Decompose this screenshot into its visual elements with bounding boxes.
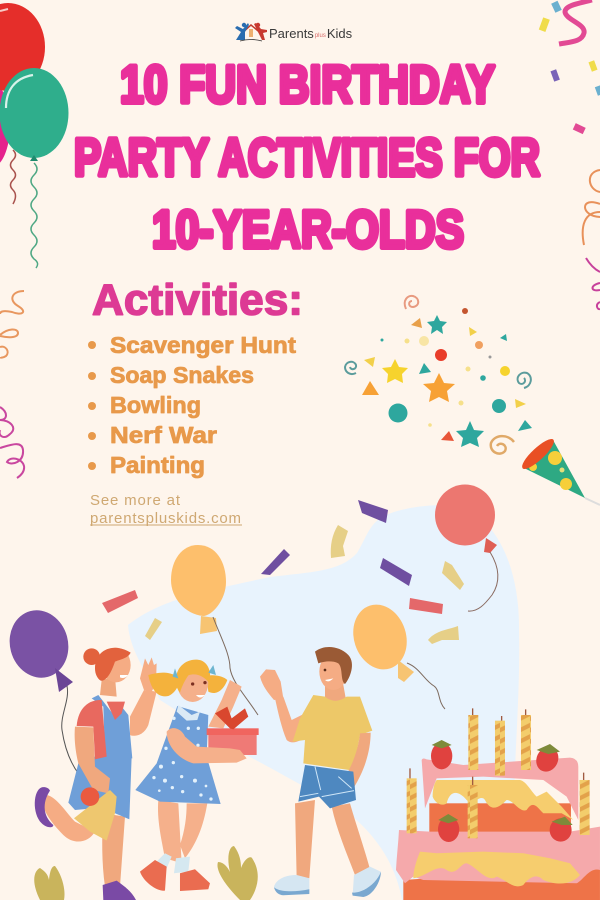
cake [396,708,600,900]
upper icing yellow [433,780,573,820]
green balloon [0,68,68,161]
hair [95,648,131,681]
hair [176,660,210,693]
candle wicks [410,708,584,785]
neck and head [100,677,117,697]
purple shoe back [35,787,53,827]
string: green [31,163,38,268]
balloon: coral [435,484,498,611]
red balloon [0,3,45,91]
spirals [345,296,531,454]
upper frosting pink [422,758,578,820]
stars [427,315,447,334]
title [74,56,540,260]
party popper [519,435,600,505]
balloon: orange right [345,598,445,709]
bag flower [81,787,99,806]
cake bottom base [403,867,600,900]
activities list: Scavenger Hunt [110,332,296,358]
bush left [34,866,65,900]
raised arm [208,680,242,728]
see more link: parentspluskids.com [90,510,241,527]
ribbons left [0,291,24,478]
dress dots [152,717,213,801]
dress [135,706,221,804]
purple strips [261,500,412,586]
hair [315,647,352,684]
logo [235,23,353,41]
legs [158,800,207,863]
balloon: purple [2,604,88,784]
confetti burst [345,296,532,454]
string: red [10,150,16,204]
ribbon orange left [0,291,24,358]
shoe soles [274,872,381,897]
activities list: Soap Snakes [110,362,254,388]
gold strips [145,525,464,644]
activities list: Nerf War [110,422,217,448]
right arm [130,690,157,736]
bush right [217,846,258,900]
candles [407,715,590,838]
hair ties [173,665,216,678]
balloon: orange left [171,545,258,715]
lower frosting pink [396,827,600,883]
activities heading: Activities: [92,276,303,324]
shorts [298,765,356,808]
girl middle [135,660,259,891]
ribbon magenta left [0,407,24,478]
shoes [140,860,210,891]
lower icing yellow [413,852,580,886]
shirt [293,695,372,771]
dots [380,308,510,427]
neck [325,685,347,703]
red shirt [77,700,107,759]
boy [260,647,381,897]
cake upper base [429,803,571,833]
activities list [88,332,296,478]
title: 10-YEAR-OLDS [152,200,464,260]
left arm [75,727,110,793]
icon: family house [235,23,267,41]
logo wordmark: Parents [269,26,314,41]
legs [295,800,371,878]
activities list: Painting [110,452,205,478]
confetti strips [102,500,464,644]
title: 10 FUN BIRTHDAY [120,56,495,114]
see more link: See more at [90,492,181,509]
gift [207,707,259,755]
balloons top left [0,3,68,268]
standing leg [102,813,125,887]
pink balloon [0,83,10,167]
right hand [140,657,157,692]
strawberries [431,740,573,842]
ribbon pink [559,0,592,44]
confetti top right [539,0,600,309]
socks [157,853,190,873]
right arm [345,733,371,788]
bushes [34,846,258,900]
hand [260,669,283,700]
background blob [128,505,519,900]
logo wordmark: plus [315,33,326,39]
see more link [90,492,242,527]
ribbon orange [583,170,600,245]
collar [177,705,200,721]
purple shoe front [103,881,136,900]
raised arm [275,697,308,742]
raised leg [43,795,95,842]
holding arm [167,728,247,763]
triangles [362,318,532,441]
girl left [35,648,157,900]
ribbon magenta [586,258,600,309]
bag [74,790,117,841]
head [319,653,347,690]
logo wordmark: Kids [327,26,353,41]
activities list: Bowling [110,392,201,418]
pigtails [148,673,227,696]
red strips [102,590,443,614]
shorts stitching [300,767,354,797]
overalls [68,695,132,819]
head [177,663,208,702]
shoes [274,867,381,897]
